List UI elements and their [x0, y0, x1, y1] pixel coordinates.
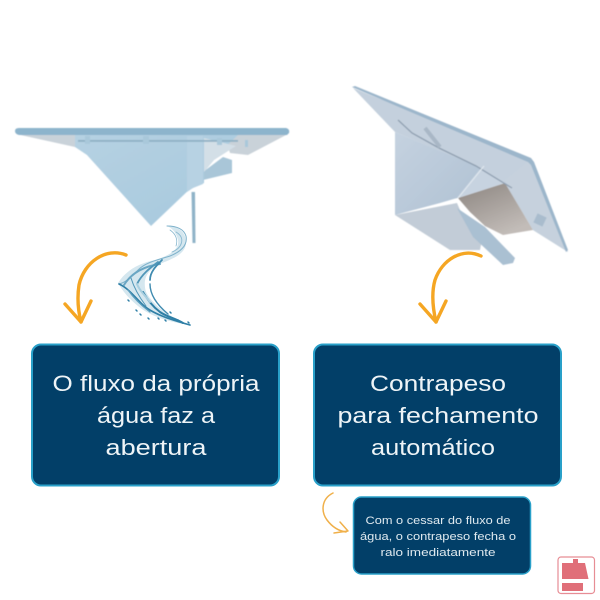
panel text: água faz a: [97, 403, 216, 428]
callout text: Com o cessar do fluxo de: [366, 515, 510, 527]
icon: pink house logo: [558, 557, 594, 594]
arrow: curved orange right: [420, 253, 481, 322]
panel text: automático: [371, 435, 495, 460]
panel text: abertura: [106, 435, 207, 460]
product photo: closed drain with counterweight: [352, 86, 568, 265]
panel text: [52, 371, 260, 460]
water splash: [118, 226, 190, 325]
panel text: [338, 371, 538, 460]
arrow: small orange to note: [323, 493, 348, 533]
callout text: ralo imediatamente: [380, 547, 496, 559]
panel text: para fechamento: [338, 403, 538, 428]
panel: counterweight closes automatically: [314, 344, 561, 486]
panel: water flow opens the drain: [32, 344, 279, 486]
arrow: curved orange left: [65, 253, 126, 322]
panel text: O fluxo da própria: [52, 371, 260, 396]
callout: note about the counterweight: [354, 497, 530, 574]
product photo: open drain with water flow: [15, 128, 289, 243]
callout text: [360, 515, 516, 559]
callout text: água, o contrapeso fecha o: [360, 531, 516, 543]
panel text: Contrapeso: [370, 371, 506, 396]
